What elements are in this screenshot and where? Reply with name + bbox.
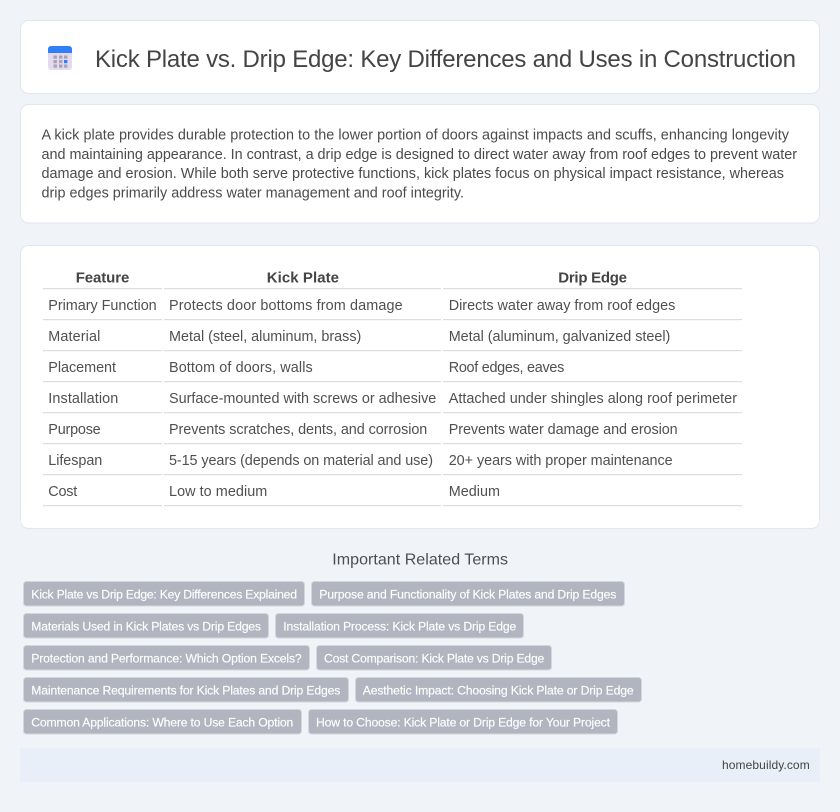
row: lifespan: [43, 453, 742, 475]
tag: [276, 614, 524, 638]
row: material: Material: [48, 329, 100, 345]
panel: summary paragraph: drip edges primarily address water management and roof integrity.: [42, 186, 464, 202]
tag: [356, 678, 642, 702]
row: purpose: Purpose: [48, 422, 101, 438]
table header row: [43, 270, 742, 289]
row: material: Metal (aluminum, galvanized steel): [449, 329, 670, 345]
panel: summary paragraph: [20, 104, 820, 223]
row: lifespan: Lifespan: [48, 453, 102, 469]
panel: comparison table: [20, 246, 820, 528]
row: lifespan: 20+ years with proper maintenance: [449, 453, 673, 469]
row: primary function: [43, 298, 742, 320]
row: cost: Low to medium: [169, 484, 267, 500]
row: material: [43, 329, 742, 351]
row: placement: Roof edges, eaves: [449, 360, 564, 376]
row: primary function: Protects door bottoms from damage: [169, 298, 403, 314]
related terms heading: Important Related Terms: [332, 551, 508, 568]
table header row: Drip Edge: [558, 270, 627, 287]
row: placement: [43, 360, 742, 382]
tag: [24, 614, 268, 638]
row: primary function: Directs water away from roof edges: [449, 298, 675, 314]
row: placement: Placement: [48, 360, 116, 376]
tag: Kick Plate vs Drip Edge: Key Differences Explained: [31, 587, 297, 601]
row: cost: Medium: [449, 484, 500, 500]
tag: Materials Used in Kick Plates vs Drip Edges: [31, 619, 261, 633]
row: placement: Bottom of doors, walls: [169, 360, 313, 376]
row: primary function: Primary Function: [48, 298, 157, 314]
row: installation: [43, 391, 742, 413]
tag: [312, 582, 624, 606]
related terms tags: [24, 582, 642, 734]
row: cost: Cost: [48, 484, 77, 500]
tag: Purpose and Functionality of Kick Plates and Drip Edges: [319, 587, 616, 601]
tag: Common Applications: Where to Use Each Option: [31, 715, 293, 729]
tag: Maintenance Requirements for Kick Plates and Drip Edges: [31, 683, 340, 697]
row: installation: Installation: [48, 391, 118, 407]
row: cost: [43, 484, 742, 506]
header panel: [20, 20, 820, 94]
icon: calendar: [48, 46, 72, 70]
tag: [24, 678, 348, 702]
row: lifespan: 5-15 years (depends on material and use): [169, 453, 433, 469]
tag: Cost Comparison: Kick Plate vs Drip Edge: [324, 651, 545, 665]
tag: [24, 646, 310, 670]
row: purpose: Prevents scratches, dents, and corrosion: [169, 422, 427, 438]
tag: [316, 646, 552, 670]
row: installation: Attached under shingles along roof perimeter: [449, 391, 737, 407]
tag: [24, 582, 304, 606]
tag: How to Choose: Kick Plate or Drip Edge for Your Project: [316, 715, 611, 729]
row: installation: Surface-mounted with screws or adhesive: [169, 391, 436, 407]
table header row: Feature: [76, 270, 129, 287]
footer: homebuildy.com: [722, 758, 810, 772]
tag: Aesthetic Impact: Choosing Kick Plate or Drip Edge: [363, 683, 634, 697]
tag: Protection and Performance: Which Option Excels?: [31, 651, 302, 665]
tag: [24, 710, 302, 734]
row: material: Metal (steel, aluminum, brass): [169, 329, 361, 345]
table header row: Kick Plate: [267, 270, 339, 287]
row: purpose: Prevents water damage and erosion: [449, 422, 678, 438]
row: purpose: [43, 422, 742, 444]
tag: Installation Process: Kick Plate vs Drip Edge: [283, 619, 517, 633]
panel: summary paragraph: damage and erosion. While both serve protective functions, kick plates focus on physical impact resistance, whereas: [42, 166, 784, 182]
title: Kick Plate vs. Drip Edge: Key Differences and Uses in Construction: [95, 46, 796, 73]
footer: [20, 748, 820, 782]
panel: summary paragraph: A kick plate provides durable protection to the lower portion of doors against impacts and scuffs, enhancing longevity: [42, 127, 790, 143]
panel: summary paragraph: and maintaining appearance. In contrast, a drip edge is designed to direct water away from roof edges to prevent water: [42, 147, 797, 163]
tag: [308, 710, 618, 734]
